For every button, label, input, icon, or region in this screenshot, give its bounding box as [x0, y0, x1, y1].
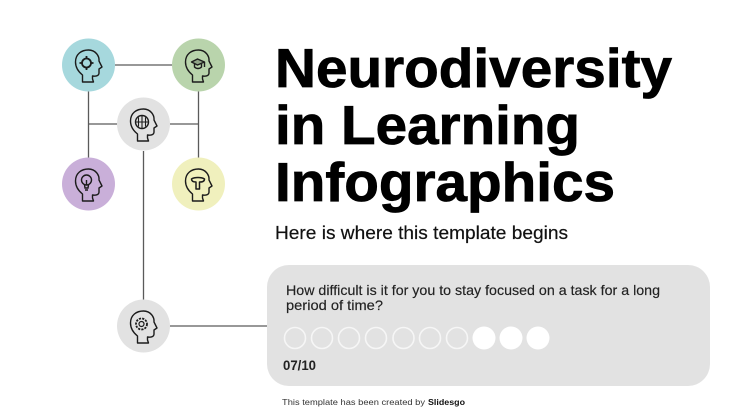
- question text: period of time?: [286, 297, 383, 313]
- node: focus target head: [62, 38, 115, 92]
- question text: [286, 282, 660, 313]
- title: Neurodiversity: [275, 37, 672, 99]
- score: 07/10: [283, 357, 316, 373]
- footer credit: This template has been created by: [282, 397, 426, 407]
- panel: survey question: [267, 265, 710, 386]
- footer credit: Slidesgo: [428, 397, 465, 407]
- title: in Learning: [275, 94, 580, 156]
- node: light bulb head: [62, 158, 115, 210]
- connector lines: [88, 65, 268, 326]
- subtitle: Here is where this template begins: [275, 223, 568, 243]
- node: graduation cap head: [172, 38, 225, 92]
- title: Infographics: [275, 151, 615, 213]
- title: [275, 37, 672, 213]
- question text: How difficult is it for you to stay focused on a task for a long: [286, 282, 660, 298]
- node: gear head: [117, 300, 170, 352]
- node: T-shape head: [172, 158, 225, 210]
- rating scale: [284, 326, 550, 350]
- node: brain head: [117, 98, 170, 150]
